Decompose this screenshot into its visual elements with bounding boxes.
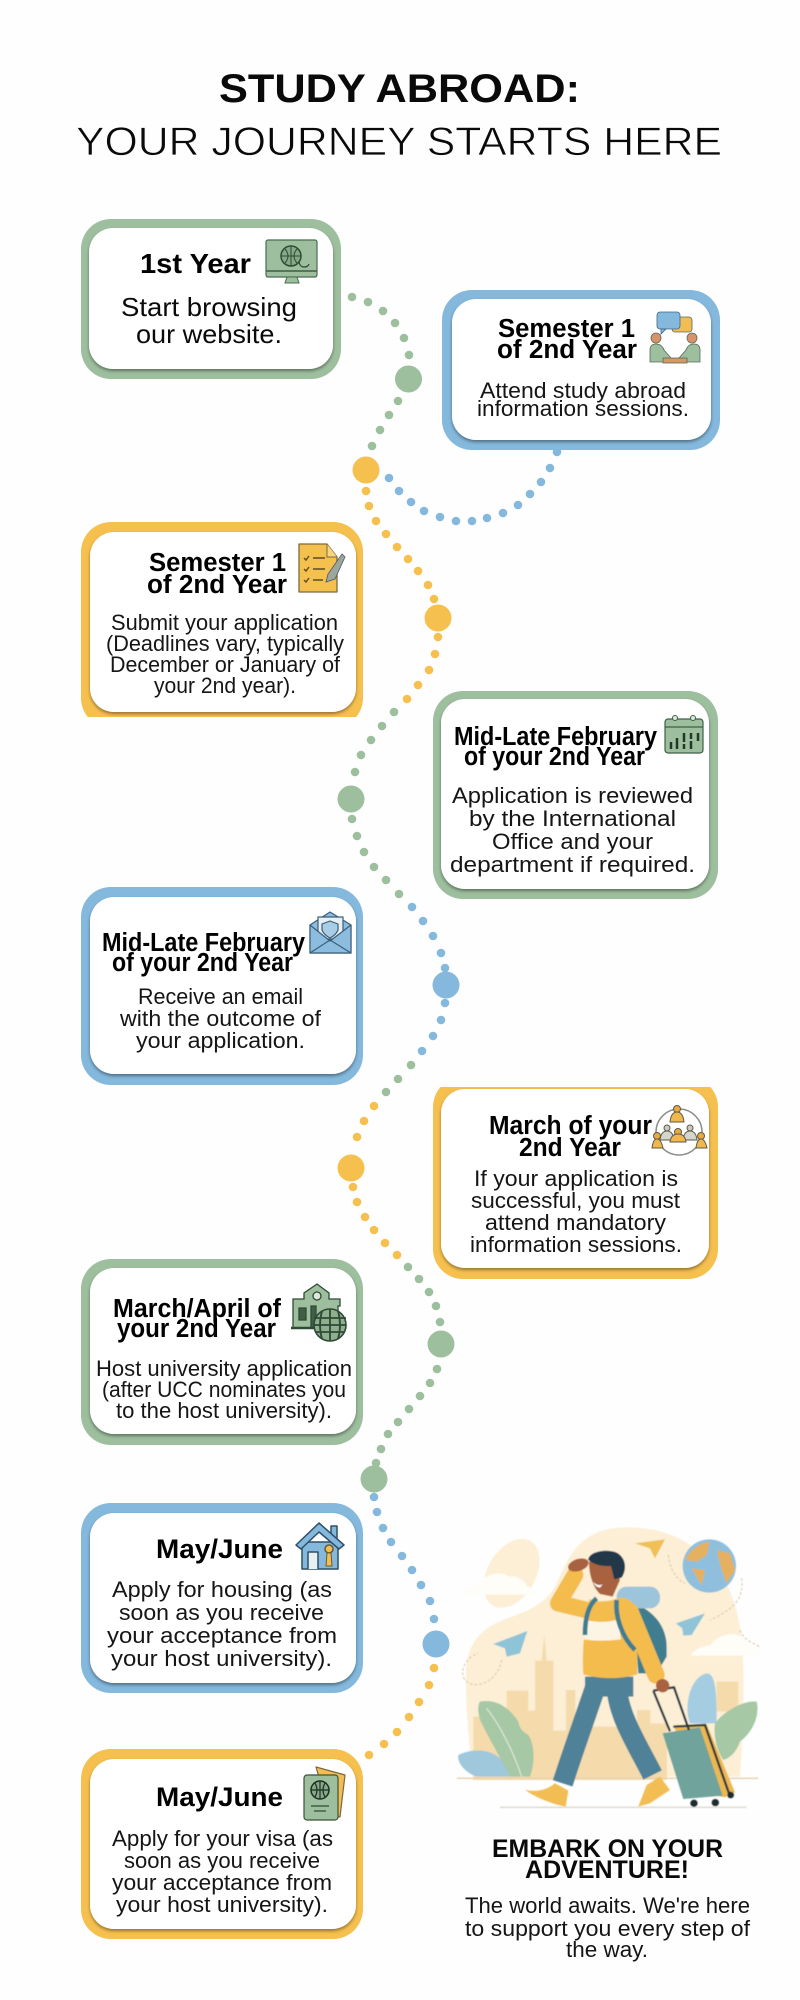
- text: attend sessions: information sessions.: [477, 396, 689, 421]
- trousers: [563, 1677, 653, 1783]
- heading: May/June: May/June: [156, 1534, 283, 1564]
- dotted path: yellow segment to second card row: [352, 456, 452, 703]
- text: application reviewed: by the International: [469, 806, 676, 831]
- heading: March of your 2nd Year: March of your: [489, 1112, 652, 1140]
- text: start browsing: [121, 292, 297, 349]
- icon: passport: [304, 1767, 345, 1820]
- text: mandatory sessions: [470, 1166, 682, 1257]
- dotted path: green short segment: [382, 1061, 415, 1096]
- title: STUDY ABROAD:: [219, 67, 580, 111]
- text: receive email: with the outcome of: [119, 1006, 322, 1031]
- heading: Semester 1 of 2nd Year: [497, 315, 637, 364]
- text: apply for visa: your host university).: [116, 1892, 328, 1917]
- dotted path: blue final segment: [370, 1493, 450, 1658]
- heading: Semester 1 of 2nd Year: Semester 1: [149, 549, 286, 577]
- text: apply for visa: [112, 1826, 333, 1917]
- heading: Mid-Late February of your 2nd Year: Mid-Late February: [454, 723, 658, 751]
- dotted path: blue mid segment: [408, 903, 460, 1055]
- straps: [585, 1598, 635, 1650]
- text: apply for housing: your acceptance from: [107, 1623, 337, 1648]
- heading: March of your 2nd Year: [489, 1112, 652, 1162]
- panel: Semester 1 of 2nd Year, submit application: [81, 522, 363, 728]
- icon: two people talking: [650, 312, 700, 363]
- ground lines: [457, 1776, 758, 1780]
- skyline: [473, 1635, 738, 1780]
- dotted path: green from 1st year to yellow node: [348, 293, 422, 450]
- suitcase: [653, 1687, 735, 1807]
- background blob: [466, 1527, 744, 1777]
- text: start browsing: our website.: [136, 319, 282, 349]
- text: apply for visa: Apply for your visa (as: [112, 1826, 333, 1851]
- sweater and arms: [558, 1575, 669, 1692]
- paper planes: [493, 1539, 705, 1657]
- text: host university application: (after UCC nominates you: [102, 1377, 346, 1402]
- text: host university application: Host university application: [96, 1356, 352, 1381]
- heading: Mid-Late February of your 2nd Year: Mid-Late February: [102, 929, 306, 957]
- icon: checklist document and pen: [299, 544, 345, 592]
- backpack: [617, 1587, 667, 1673]
- heading: Semester 1 of 2nd Year: of 2nd Year: [147, 571, 287, 599]
- panel: Mid-Late February, application reviewed: [433, 691, 718, 899]
- panel: May/June, visa: [81, 1749, 363, 1939]
- leaves: [458, 1673, 757, 1777]
- heading: Semester 1 of 2nd Year: [147, 549, 287, 599]
- text: submit application: [106, 610, 344, 698]
- heading: March/April of your 2nd Year: March/April of: [113, 1295, 281, 1323]
- heading: Semester 1 of 2nd Year: of 2nd Year: [497, 336, 637, 364]
- dashed flight paths: [463, 1555, 760, 1685]
- panel: Semester 1 of 2nd Year, information sessions: [442, 290, 720, 450]
- panel: May/June, housing: [81, 1503, 363, 1693]
- text: submit application: (Deadlines vary, typically: [106, 631, 344, 656]
- text: host university application: [96, 1356, 352, 1423]
- heading: 1st Year: 1st Year: [140, 248, 251, 279]
- heading: Mid-Late February of your 2nd Year: of your 2nd Year: [464, 743, 645, 771]
- panel: 1st Year: [81, 219, 341, 379]
- closing heading: [492, 1835, 723, 1884]
- closing heading: ADVENTURE!: [525, 1856, 689, 1884]
- globe: [683, 1539, 736, 1593]
- icon: university building and globe: [291, 1284, 346, 1341]
- icon: computer with globe: [266, 240, 317, 283]
- heading: May/June: May/June: [156, 1782, 283, 1812]
- text: submit application: December or January of: [110, 652, 341, 677]
- text: submit application: Submit your application: [111, 610, 338, 635]
- closing text: to support you every step of: [465, 1916, 751, 1941]
- icon: calendar: [665, 716, 703, 753]
- heading: March/April of your 2nd Year: [113, 1295, 281, 1343]
- closing heading: EMBARK ON YOUR: [492, 1835, 723, 1863]
- text: mandatory sessions: If your application is: [474, 1166, 678, 1191]
- head and hair: [566, 1551, 625, 1597]
- text: apply for housing: your host university).: [111, 1646, 332, 1671]
- dotted path: yellow lower segment: [338, 1102, 401, 1259]
- text: apply for visa: soon as you receive: [124, 1848, 320, 1873]
- icon: group of people in a circle: [652, 1106, 707, 1155]
- closing text: the way.: [566, 1937, 648, 1962]
- text: attend sessions: Attend study abroad: [480, 378, 686, 403]
- heading: March/April of your 2nd Year: your 2nd Year: [117, 1315, 276, 1343]
- heading: Mid-Late February of your 2nd Year: of your 2nd Year: [112, 949, 293, 977]
- text: receive email: your application.: [136, 1028, 305, 1053]
- heading: Mid-Late February of your 2nd Year: [454, 723, 658, 771]
- text: mandatory sessions: attend mandatory: [485, 1210, 666, 1235]
- panel: March/April of your 2nd Year: [81, 1259, 363, 1445]
- text: receive email: Receive an email: [138, 984, 303, 1009]
- clouds: [462, 1573, 762, 1656]
- dotted path: green mid segment: [338, 708, 403, 898]
- closing text: The world awaits. We're here: [465, 1893, 750, 1918]
- icon: open envelope: [310, 912, 351, 953]
- text: application reviewed: department if required.: [450, 852, 695, 877]
- text: apply for housing: Apply for housing (as: [112, 1577, 332, 1602]
- dotted path: yellow final segment: [365, 1664, 438, 1759]
- lower ground line: [500, 1805, 747, 1809]
- text: apply for housing: [107, 1577, 337, 1671]
- text: receive email: [119, 984, 322, 1053]
- heading: Mid-Late February of your 2nd Year: [102, 929, 306, 977]
- heading: March of your 2nd Year: 2nd Year: [519, 1134, 621, 1162]
- text: mandatory sessions: information sessions.: [470, 1232, 682, 1257]
- panel: Mid-Late February, receive email: [81, 887, 363, 1085]
- heading: Semester 1 of 2nd Year: Semester 1: [498, 315, 635, 343]
- shoes: [525, 1777, 670, 1807]
- closing text: [465, 1893, 751, 1962]
- text: mandatory sessions: successful, you must: [471, 1188, 680, 1213]
- text: application reviewed: [450, 783, 695, 877]
- text: application reviewed: Application is reviewed: [452, 783, 693, 808]
- illustration: traveller walking with suitcase: [457, 1527, 762, 1807]
- text: host university application: to the host university).: [116, 1398, 332, 1423]
- text: apply for housing: soon as you receive: [119, 1600, 324, 1625]
- text: start browsing: Start browsing: [121, 292, 297, 322]
- title: YOUR JOURNEY STARTS HERE: [76, 120, 722, 164]
- text: apply for visa: your acceptance from: [112, 1870, 332, 1895]
- text: attend sessions: [477, 378, 689, 421]
- icon: house with key: [296, 1523, 344, 1569]
- text: submit application: your 2nd year).: [154, 673, 296, 698]
- title: [76, 67, 722, 164]
- text: application reviewed: Office and your: [492, 829, 653, 854]
- dotted path: green lower segment: [360, 1263, 454, 1492]
- panel: March of your 2nd Year: [433, 1077, 718, 1279]
- dotted path: blue from semester 1 card: [385, 448, 561, 525]
